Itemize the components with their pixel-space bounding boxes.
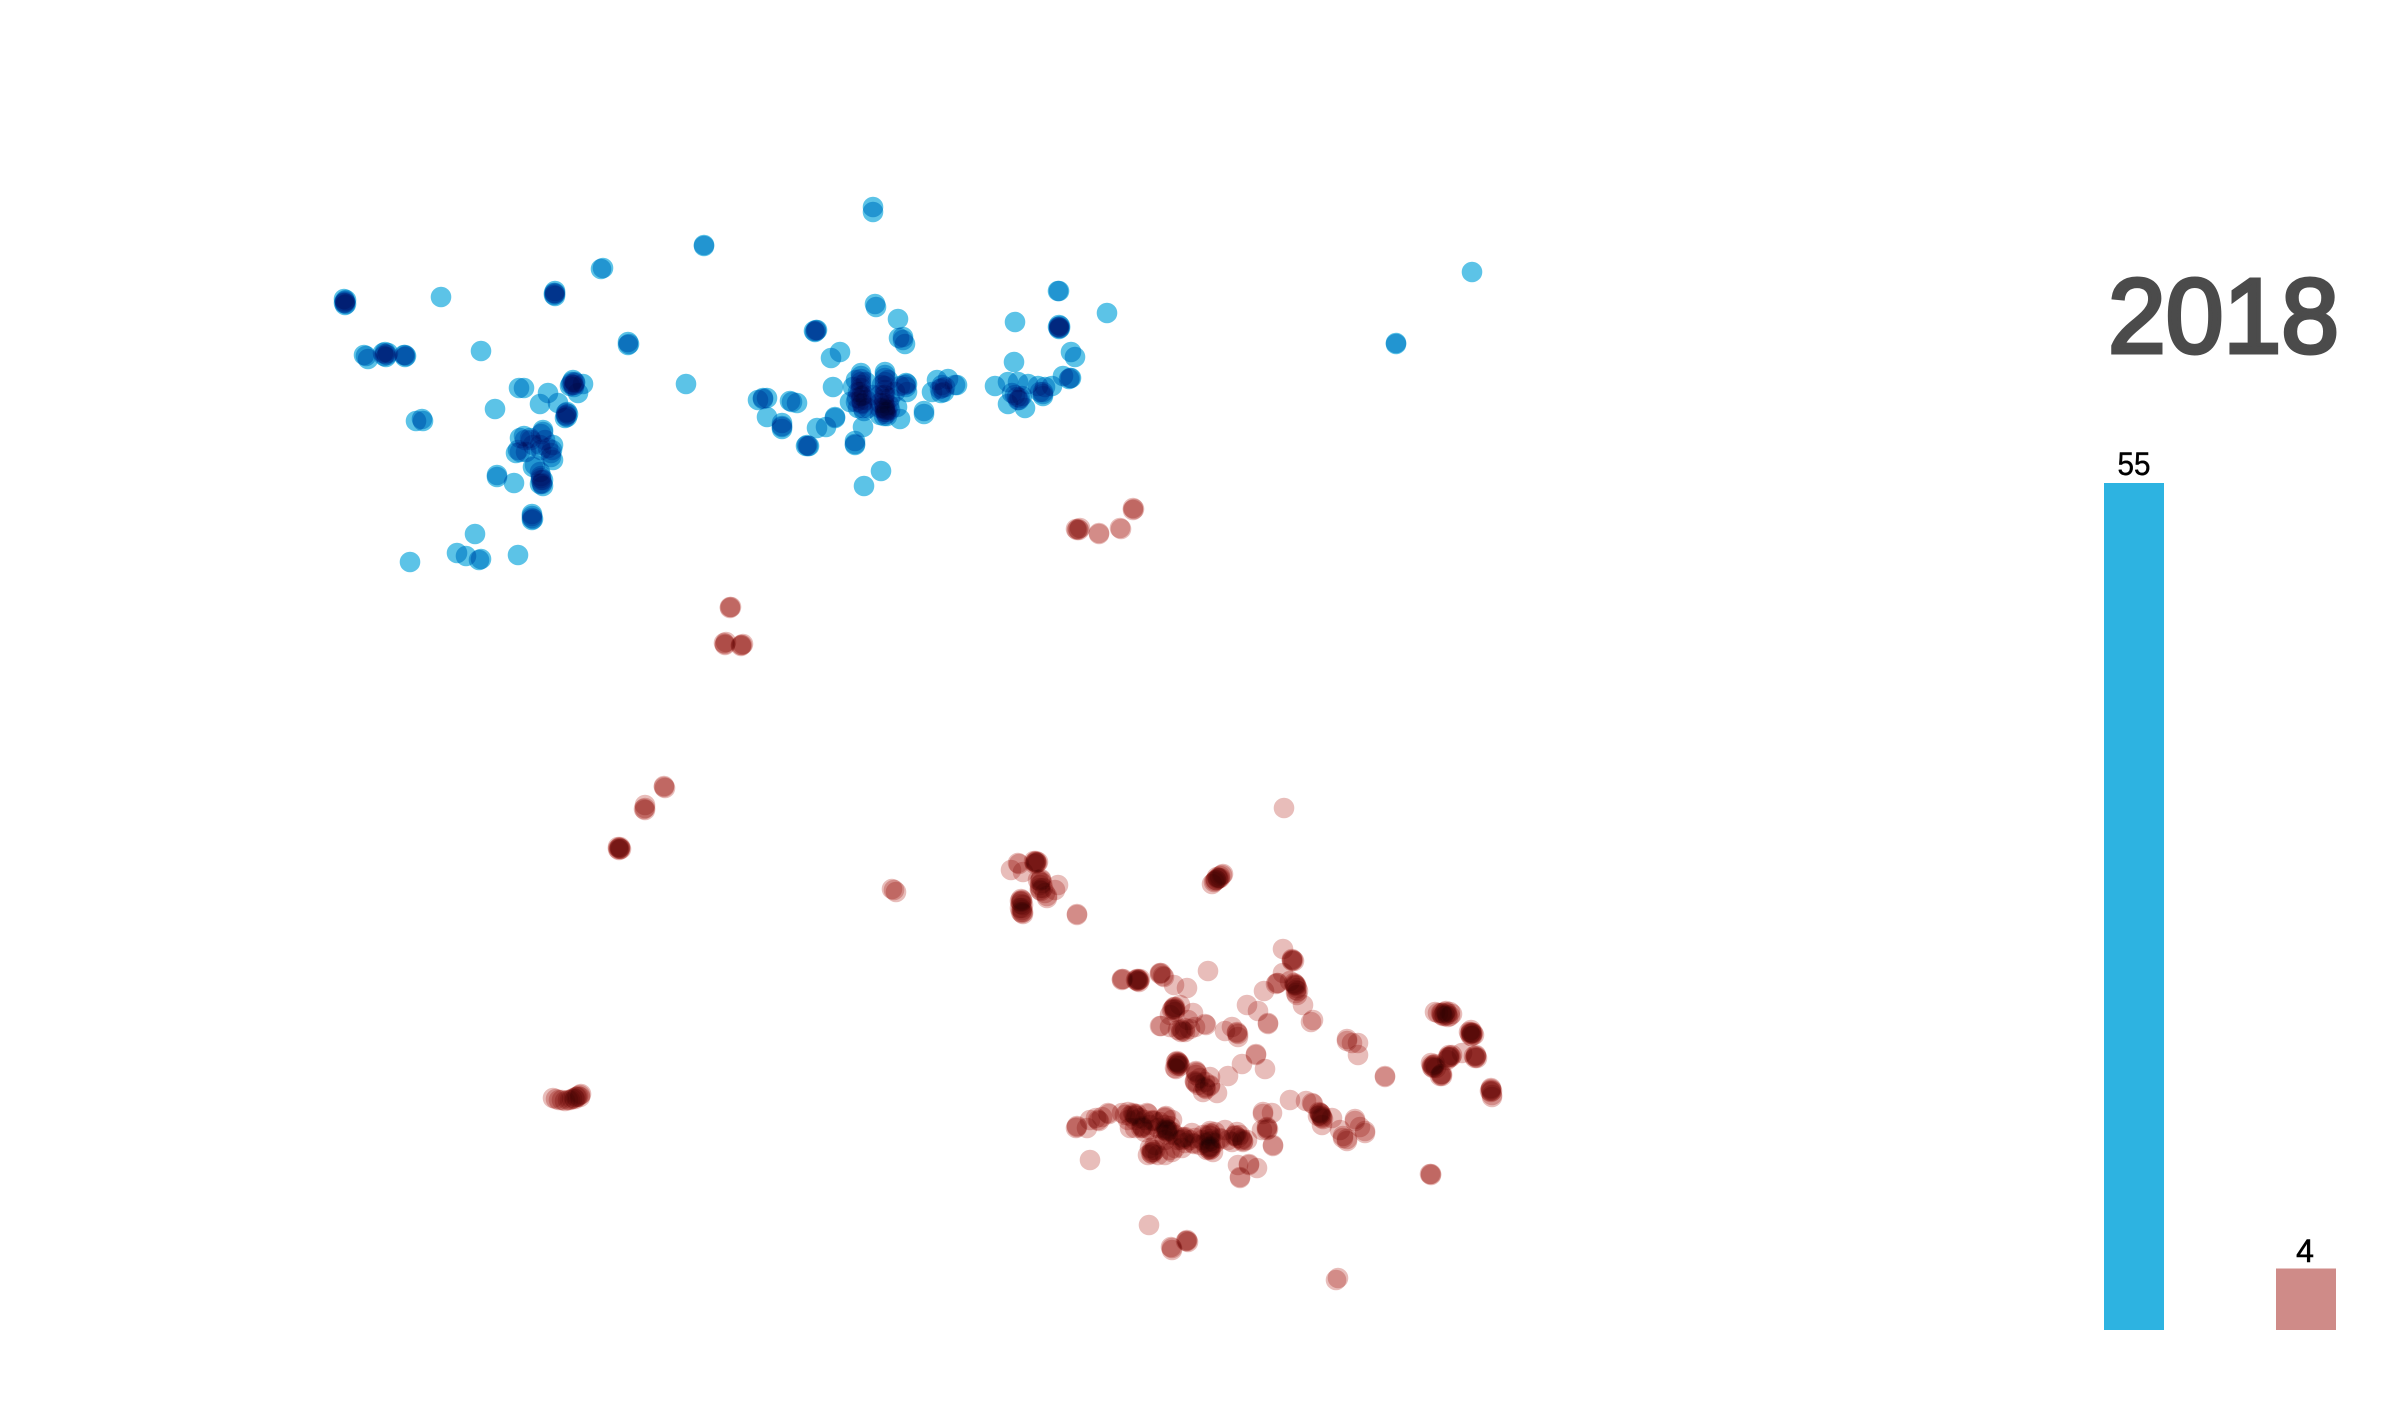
red cluster: lower main mass bbox=[1112, 939, 1395, 1103]
bar: red count 4 bbox=[2276, 1233, 2336, 1330]
red cluster: right bbox=[1420, 1001, 1502, 1185]
blue cluster: left column bbox=[400, 370, 593, 572]
scatter: blue points bbox=[334, 197, 1482, 572]
red cluster: upper scattered bbox=[543, 498, 1144, 1111]
bar: red count 4: 4 bbox=[2296, 1233, 2314, 1269]
bar: blue count 55: 55 bbox=[2118, 446, 2150, 482]
red cluster: bottom band bbox=[1066, 1090, 1375, 1290]
scatter: red points bbox=[543, 498, 1502, 1290]
blue cluster: centre bbox=[676, 294, 967, 496]
year heading: 2018 bbox=[2108, 258, 2339, 376]
red cluster: middle bbox=[1001, 798, 1294, 925]
bar: blue count 55 bbox=[2104, 446, 2164, 1330]
blue cluster: upper left bbox=[334, 197, 883, 369]
blue cluster: right group bbox=[985, 262, 1482, 418]
